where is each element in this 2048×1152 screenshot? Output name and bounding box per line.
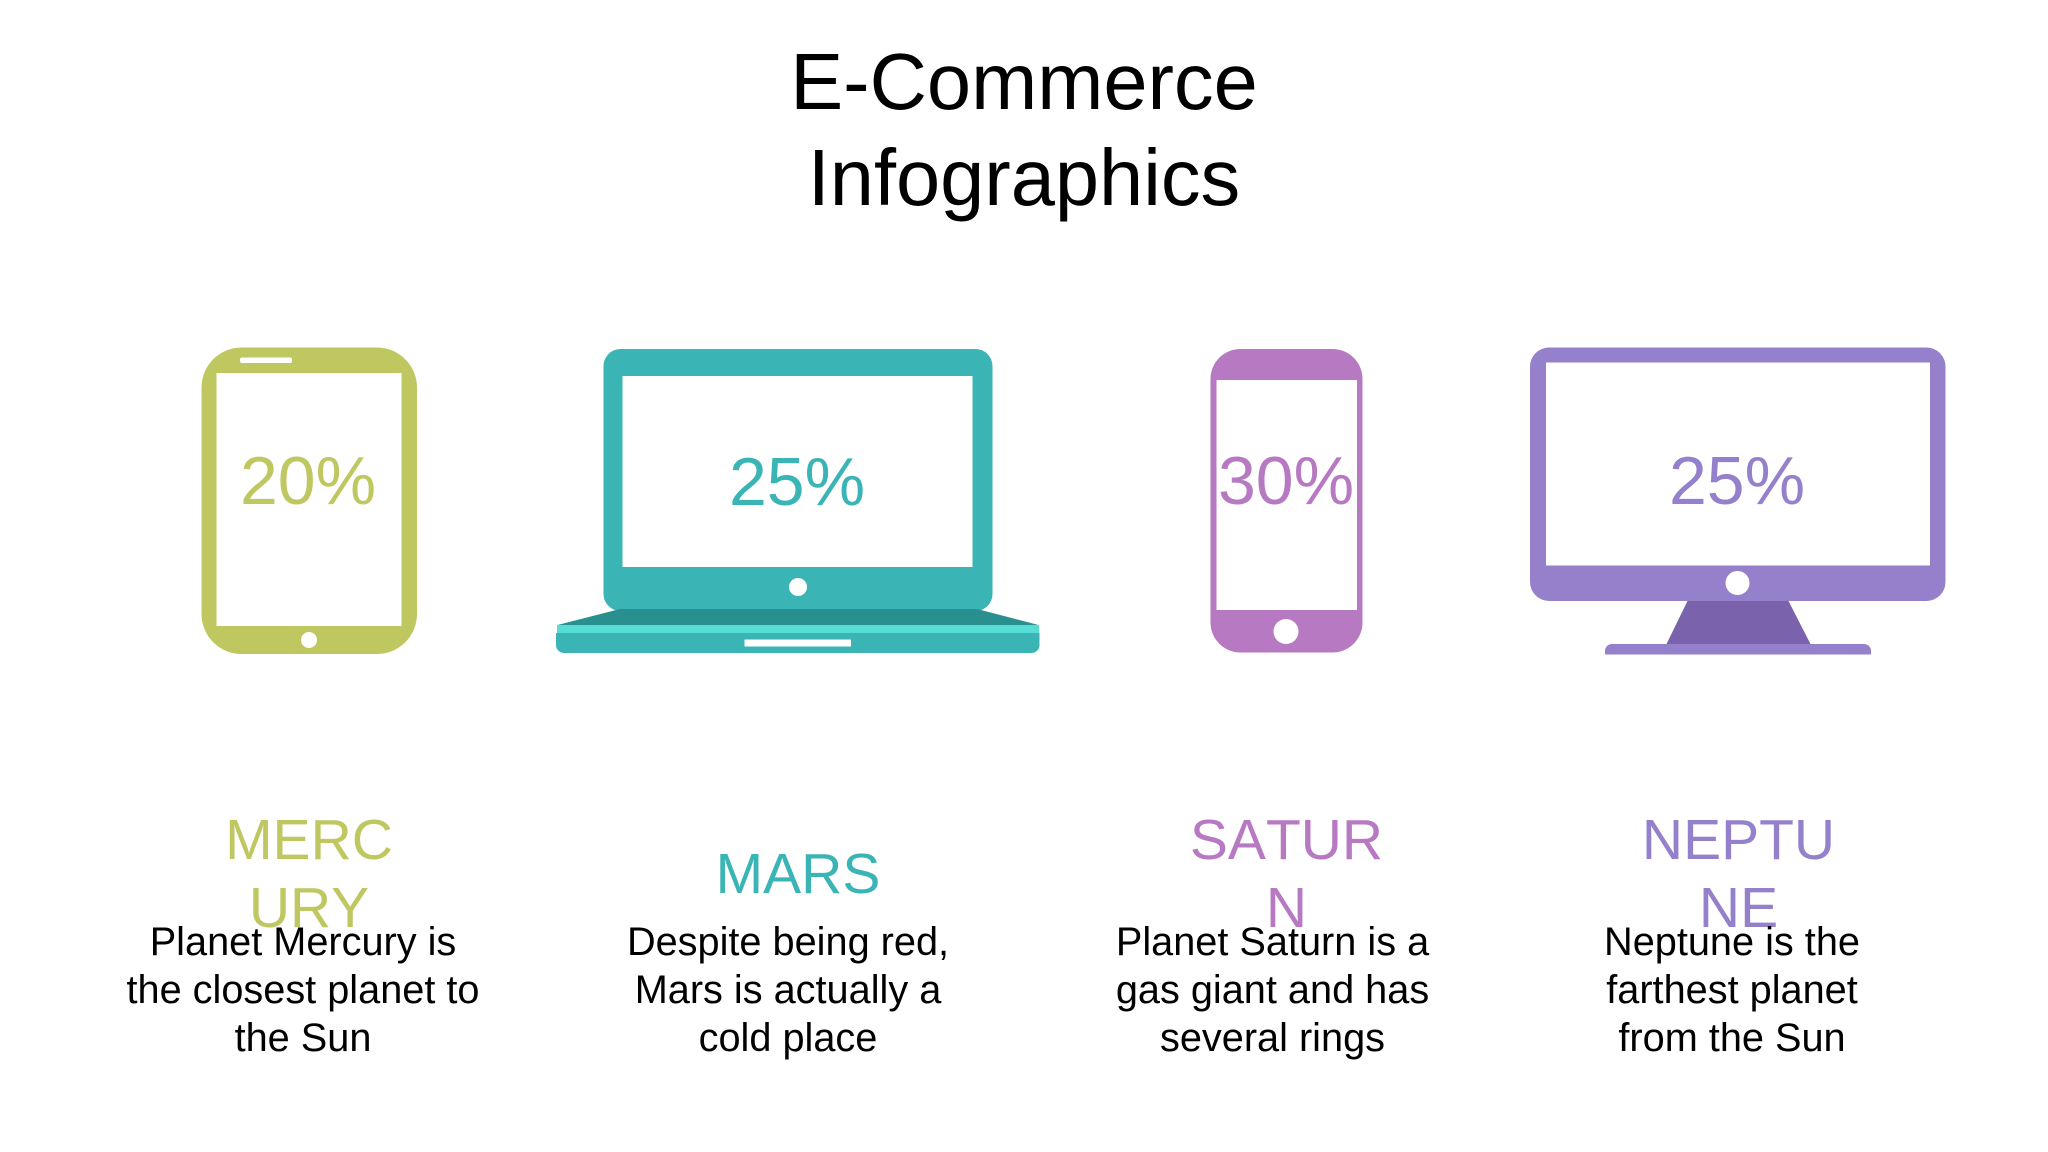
icon: smartphone <box>1210 349 1362 652</box>
label: Neptune: NE <box>1699 876 1778 940</box>
text: Neptune description <box>1604 920 1860 1060</box>
text: Mercury description: the closest planet to <box>126 968 480 1012</box>
label: Mercury <box>225 808 393 940</box>
label: Mercury: MERC <box>225 808 393 872</box>
percentage: 25% monitor: 25% <box>1669 443 1805 519</box>
icon: desktop monitor <box>1530 348 1946 654</box>
title <box>790 37 1258 222</box>
percentage: 30%: 30% <box>1218 443 1354 519</box>
percentage: 25% laptop: 25% <box>729 444 865 520</box>
text: Mars description: Despite being red, <box>627 920 949 964</box>
title: Infographics <box>808 133 1240 222</box>
title: E-Commerce <box>790 37 1258 126</box>
label: Neptune: NEPTU <box>1642 808 1835 872</box>
text: Saturn description <box>1116 920 1430 1060</box>
text: Saturn description: Planet Saturn is a <box>1116 920 1430 964</box>
text: Mars description <box>627 920 949 1060</box>
label: Saturn: N <box>1266 876 1307 940</box>
label: Mars: MARS <box>716 842 880 906</box>
text: Mercury description: the Sun <box>235 1016 371 1060</box>
icon: laptop <box>556 349 1040 653</box>
icon: tablet <box>202 348 417 654</box>
text: Neptune description: farthest planet <box>1606 968 1858 1012</box>
label: Saturn <box>1190 808 1383 940</box>
percentage: 20%: 20% <box>240 443 376 519</box>
text: Mercury description <box>126 920 480 1060</box>
text: Neptune description: Neptune is the <box>1604 920 1860 964</box>
label: Saturn: SATUR <box>1190 808 1383 872</box>
text: Mars description: cold place <box>699 1016 877 1060</box>
text: Saturn description: several rings <box>1160 1016 1385 1060</box>
text: Mercury description: Planet Mercury is <box>150 920 456 964</box>
text: Mars description: Mars is actually a <box>635 968 942 1012</box>
label: Mercury: URY <box>249 876 369 940</box>
label: Neptune <box>1642 808 1835 940</box>
text: Neptune description: from the Sun <box>1618 1016 1846 1060</box>
text: Saturn description: gas giant and has <box>1116 968 1429 1012</box>
